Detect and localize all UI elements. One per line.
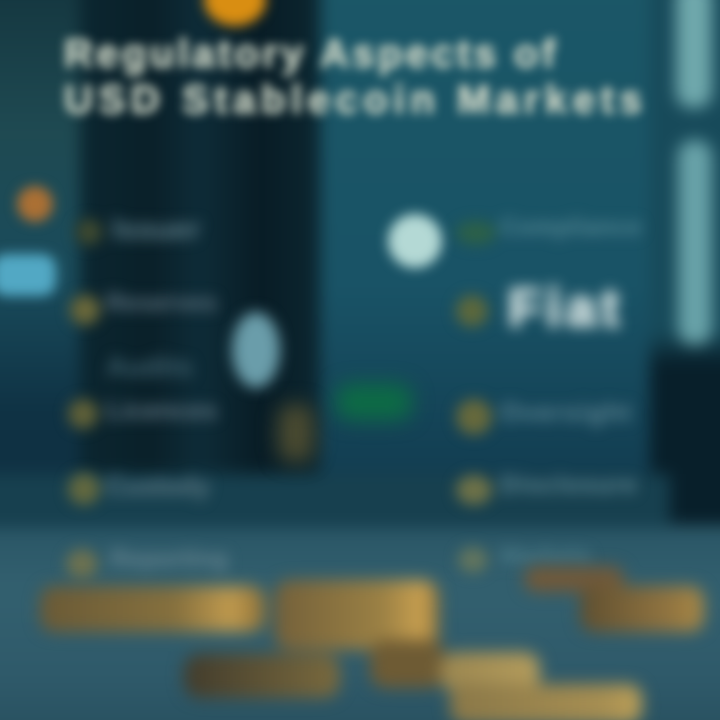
bullet 5 — [68, 473, 100, 505]
list: right column bullets and labels — [449, 214, 642, 578]
icon: blue pill left — [0, 254, 56, 296]
panel: dark centre column — [80, 0, 320, 480]
label 6: Reporting — [110, 545, 228, 573]
icon: orange sun at top — [204, 0, 266, 26]
bullet 4 — [68, 399, 98, 429]
coin lower left — [184, 654, 340, 698]
coin right upper — [524, 566, 624, 592]
label 2: Fiat — [508, 278, 624, 338]
bullet 1 — [76, 219, 102, 245]
panel: pale lower bar — [678, 140, 712, 345]
coin centre foot — [370, 640, 445, 688]
label 1: Compliance — [500, 214, 642, 241]
list: left column bullets and labels — [60, 213, 230, 582]
icon: orange dot left — [17, 186, 53, 222]
coin stack centre — [274, 580, 439, 650]
icon: green check — [336, 384, 412, 420]
label 4: Disclosure — [500, 471, 638, 499]
label 1: Issuer — [112, 213, 200, 246]
title — [58, 31, 647, 122]
label 5: Custody — [106, 471, 210, 501]
bullet 2 — [456, 295, 488, 327]
illustration: gold coins — [32, 557, 715, 720]
coin lower right — [440, 652, 540, 692]
label 3: Audits — [106, 351, 193, 382]
coin bottom — [450, 684, 642, 720]
icon: amber smudge — [278, 404, 314, 462]
panel: teal right area — [320, 0, 665, 490]
title: Regulatory Aspects of — [64, 32, 558, 76]
label 4: Licences — [106, 395, 217, 425]
label 2: Reserves — [106, 289, 217, 317]
panel: horizontal band — [0, 474, 670, 528]
panel: pale upper bar — [676, 0, 712, 108]
panel: left strip — [0, 0, 90, 520]
bullet 4 — [456, 475, 492, 505]
label 5: Markets — [500, 543, 591, 570]
bullet 5 — [458, 547, 488, 573]
label 3: Oversight — [500, 397, 632, 427]
title: USD Stablecoin Markets — [64, 78, 647, 122]
bullet 3 — [456, 399, 492, 435]
icon: pale oval centre — [232, 312, 280, 388]
panel: table floor — [0, 525, 720, 720]
coin stack left — [40, 586, 265, 632]
bullet 2 — [70, 295, 100, 325]
icon: pale circle right — [388, 214, 442, 268]
bullet 1 — [456, 221, 496, 245]
coin right lower — [580, 586, 704, 632]
panel: dark right edge — [650, 0, 720, 530]
bullet 6 — [66, 549, 98, 579]
